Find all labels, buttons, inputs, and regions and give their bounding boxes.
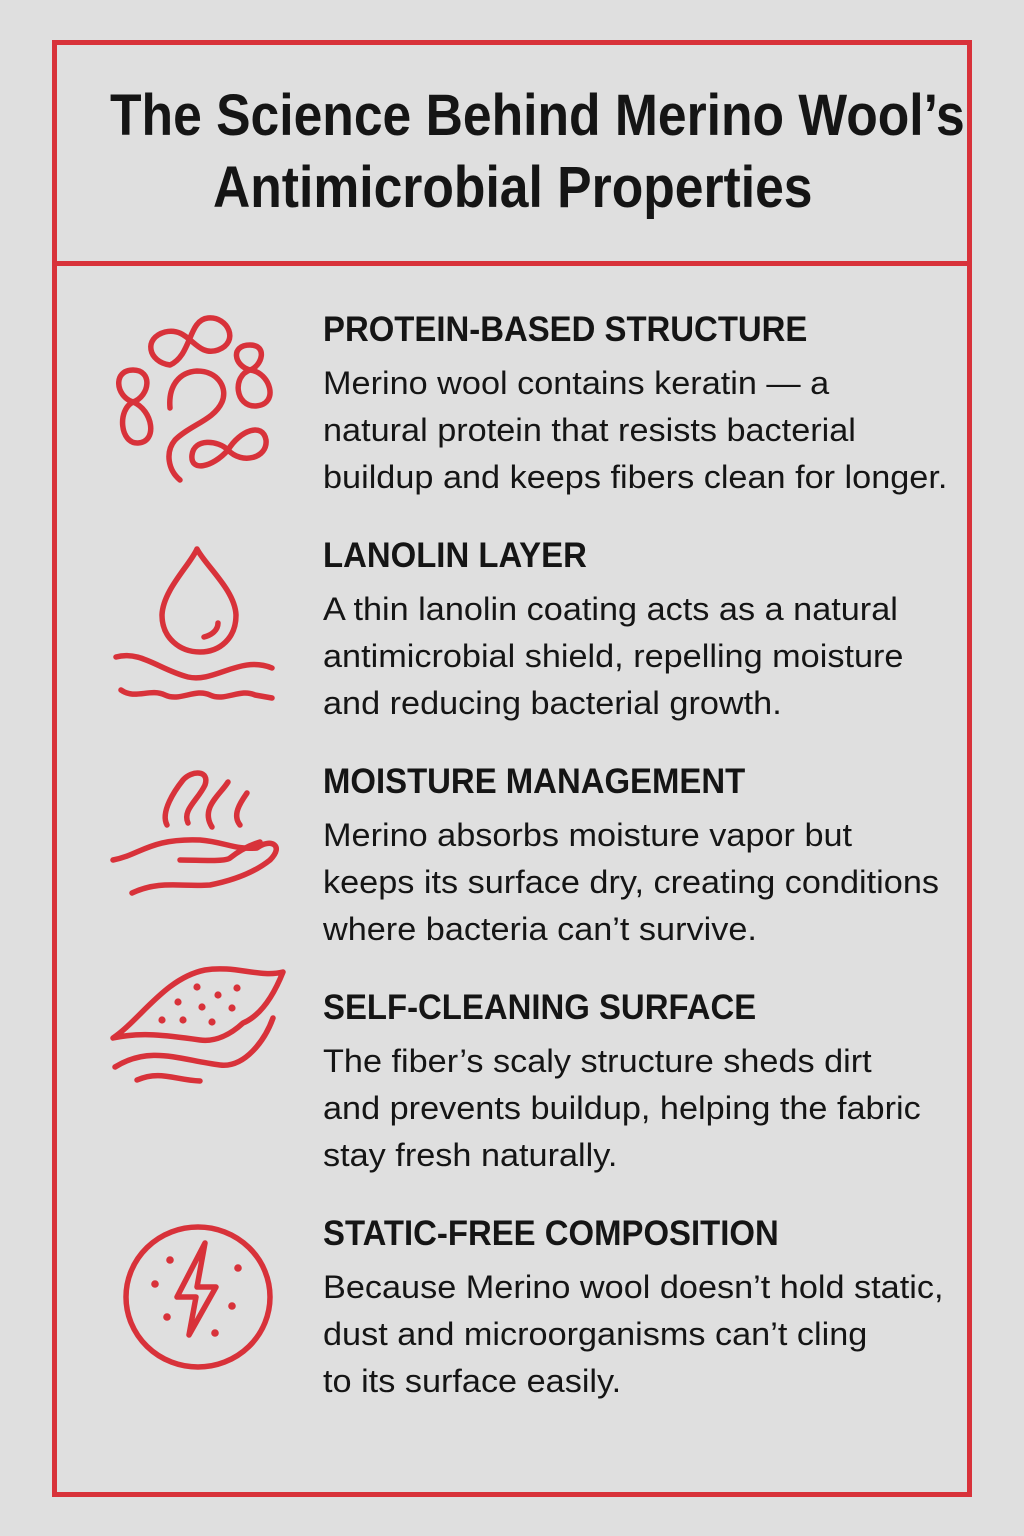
section: moisture: where bacteria can’t survive. <box>323 911 757 947</box>
section: moisture: Merino absorbs moisture vapor but <box>323 817 852 853</box>
section: static-free: STATIC-FREE COMPOSITION <box>323 1214 779 1253</box>
section: moisture: keeps its surface dry, creating conditions <box>323 864 939 900</box>
title <box>110 83 965 220</box>
section: self-cleaning: and prevents buildup, helping the fabric <box>323 1090 921 1126</box>
section: protein: buildup and keeps fibers clean for longer. <box>323 459 947 495</box>
section: moisture <box>323 762 939 947</box>
icon: static-free circle <box>123 1224 273 1370</box>
icon: protein strands <box>116 315 273 483</box>
section: protein: PROTEIN-BASED STRUCTURE <box>323 310 807 349</box>
icon: fabric fiber <box>110 966 286 1084</box>
section: static-free: to its surface easily. <box>323 1363 621 1399</box>
section: self-cleaning: SELF-CLEANING SURFACE <box>323 988 756 1027</box>
title: The Science Behind Merino Wool’s <box>110 83 965 148</box>
section: lanolin: LANOLIN LAYER <box>323 536 587 575</box>
icon: water drop <box>113 546 275 701</box>
section: protein: natural protein that resists bacterial <box>323 412 856 448</box>
section: static-free: dust and microorganisms can’t cling <box>323 1316 867 1352</box>
section: self-cleaning: stay fresh naturally. <box>323 1137 617 1173</box>
section: self-cleaning: The fiber’s scaly structure sheds dirt <box>323 1043 872 1079</box>
section: lanolin: antimicrobial shield, repelling moisture <box>323 638 903 674</box>
section: moisture: MOISTURE MANAGEMENT <box>323 762 745 801</box>
section: self-cleaning <box>323 988 921 1173</box>
section: lanolin: A thin lanolin coating acts as a natural <box>323 591 898 627</box>
title: Antimicrobial Properties <box>213 155 813 220</box>
section: lanolin: and reducing bacterial growth. <box>323 685 782 721</box>
section: protein: Merino wool contains keratin — a <box>323 365 829 401</box>
section: static-free <box>323 1214 943 1399</box>
icon: hand with steam <box>110 770 280 896</box>
section: lanolin <box>323 536 903 721</box>
section: protein <box>323 310 947 495</box>
section: static-free: Because Merino wool doesn’t hold static, <box>323 1269 943 1305</box>
